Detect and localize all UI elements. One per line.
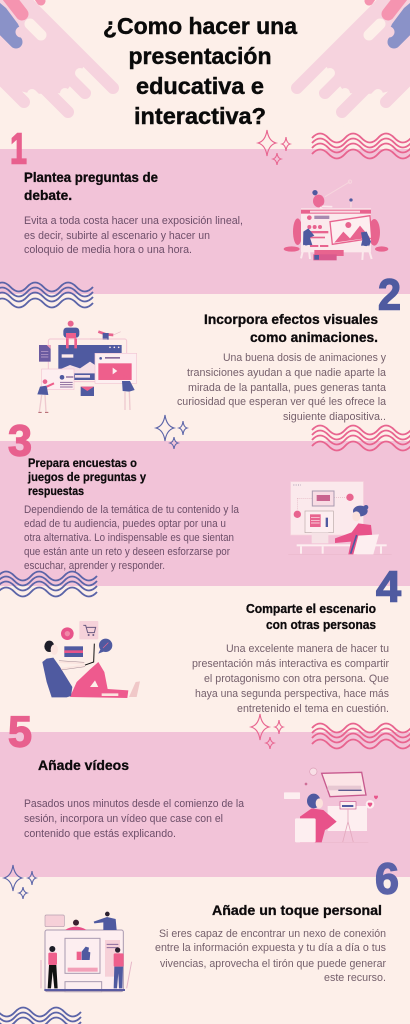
body text bbox=[24, 215, 243, 256]
title: presentación bbox=[128, 43, 272, 69]
decoration: pink waves bbox=[312, 426, 410, 450]
decoration: blue waves bbox=[0, 1008, 81, 1024]
body text: entretenido el tema en cuestión. bbox=[237, 703, 389, 715]
heading bbox=[27, 456, 146, 498]
panel: step 3 bbox=[0, 415, 410, 586]
body text bbox=[177, 352, 387, 423]
body text: es decir, subirte al escenario y hacer un bbox=[24, 230, 210, 242]
body text: Si eres capaz de encontrar un nexo de conexión bbox=[159, 928, 386, 940]
number 1: 1 bbox=[10, 124, 27, 174]
body text: entre la información expuesta y tu día a día o tus bbox=[155, 942, 387, 954]
body text: Una buena dosis de animaciones y bbox=[223, 352, 387, 364]
decoration: pink waves bbox=[312, 134, 410, 158]
decoration: top left corner strokes bbox=[0, 0, 113, 124]
icon: sparkles bbox=[258, 130, 290, 165]
heading bbox=[246, 601, 376, 632]
body text: haya una segunda perspectiva, hace más bbox=[195, 688, 390, 700]
decoration: blue waves bbox=[0, 572, 97, 596]
body text: siguiente diapositiva.. bbox=[283, 411, 386, 423]
heading: respuestas bbox=[28, 484, 84, 498]
heading: Añade vídeos bbox=[38, 758, 129, 773]
decoration: blue waves bbox=[0, 282, 93, 308]
number 2: 2 bbox=[378, 270, 401, 320]
body text: mirada de la pantalla, pues generas tanta bbox=[188, 382, 386, 394]
body text bbox=[24, 798, 244, 840]
body text: coloquio de media hora o una hora. bbox=[24, 244, 192, 256]
number 6: 6 bbox=[375, 854, 399, 904]
body text: vivencias, aprovecha el tirón que puede generar bbox=[160, 958, 386, 970]
heading: Añade un toque personal bbox=[212, 903, 382, 918]
body text: Una excelente manera de hacer tu bbox=[226, 643, 389, 655]
body text: Pasados unos minutos desde el comienzo de la bbox=[24, 798, 244, 810]
body text: Dependiendo de la temática de tu contenido y la bbox=[24, 504, 239, 516]
heading: Incorpora efectos visuales bbox=[204, 312, 378, 327]
icon: sparkles bbox=[156, 415, 187, 449]
body text: presentación más interactiva es compartir bbox=[192, 658, 389, 670]
body text: este recurso. bbox=[324, 972, 386, 984]
panel: step 1 bbox=[0, 124, 410, 294]
decoration: pink waves bbox=[312, 724, 410, 748]
heading bbox=[24, 170, 158, 203]
body text: otra alternativa. Lo indispensable es que sientan bbox=[24, 532, 234, 544]
heading: Plantea preguntas de bbox=[24, 170, 158, 185]
illustration: people building a slide bbox=[284, 180, 388, 260]
body text: curiosidad que esperan ver qué les ofrece la bbox=[177, 396, 386, 408]
illustration: social post with like bbox=[41, 912, 132, 992]
body text bbox=[192, 643, 390, 715]
panel: step 4 bbox=[0, 562, 402, 715]
body text: que están ante un reto y deseen esforzarse por bbox=[24, 546, 230, 558]
body text: contenido que estás explicando. bbox=[24, 828, 176, 840]
body text: sesión, incorpora un vídeo que case con el bbox=[24, 813, 223, 825]
body text: edad de tu audiencia, puedes optar por una u bbox=[24, 518, 226, 530]
panel: step 2 bbox=[0, 270, 401, 423]
title: interactiva? bbox=[134, 103, 266, 129]
heading: debate. bbox=[24, 188, 72, 203]
icon: sparkles bbox=[4, 865, 36, 899]
body text bbox=[155, 928, 387, 984]
title bbox=[103, 13, 297, 129]
body text: transiciones ayudan a que nadie aparte la bbox=[187, 367, 386, 379]
illustration: woman recording video bbox=[284, 768, 378, 842]
number 5: 5 bbox=[8, 708, 32, 756]
body text: escuchar, aprender y responder. bbox=[24, 560, 165, 572]
decoration: top right corner strokes bbox=[297, 0, 410, 124]
panel: step 6 bbox=[0, 854, 399, 1024]
heading: juegos de preguntas y bbox=[27, 470, 146, 484]
panel: step 5 bbox=[0, 708, 410, 877]
body text: el protagonismo con otra persona. Que bbox=[204, 673, 389, 685]
heading: como animaciones. bbox=[250, 330, 378, 345]
illustration: man with laptop bbox=[42, 621, 140, 698]
heading: Comparte el escenario bbox=[246, 601, 376, 616]
illustration: woman at computer bbox=[288, 482, 392, 554]
number 3: 3 bbox=[8, 416, 32, 466]
heading: Prepara encuestas o bbox=[28, 456, 137, 470]
title: educativa e bbox=[136, 73, 264, 99]
illustration: web windows and people bbox=[37, 321, 137, 412]
title: ¿Como hacer una bbox=[103, 13, 297, 39]
heading: con otras personas bbox=[266, 617, 376, 632]
heading bbox=[204, 312, 378, 345]
body text bbox=[24, 504, 239, 572]
body text: Evita a toda costa hacer una exposición lineal, bbox=[24, 215, 243, 227]
number 4: 4 bbox=[376, 562, 402, 612]
icon: sparkles bbox=[251, 714, 283, 749]
